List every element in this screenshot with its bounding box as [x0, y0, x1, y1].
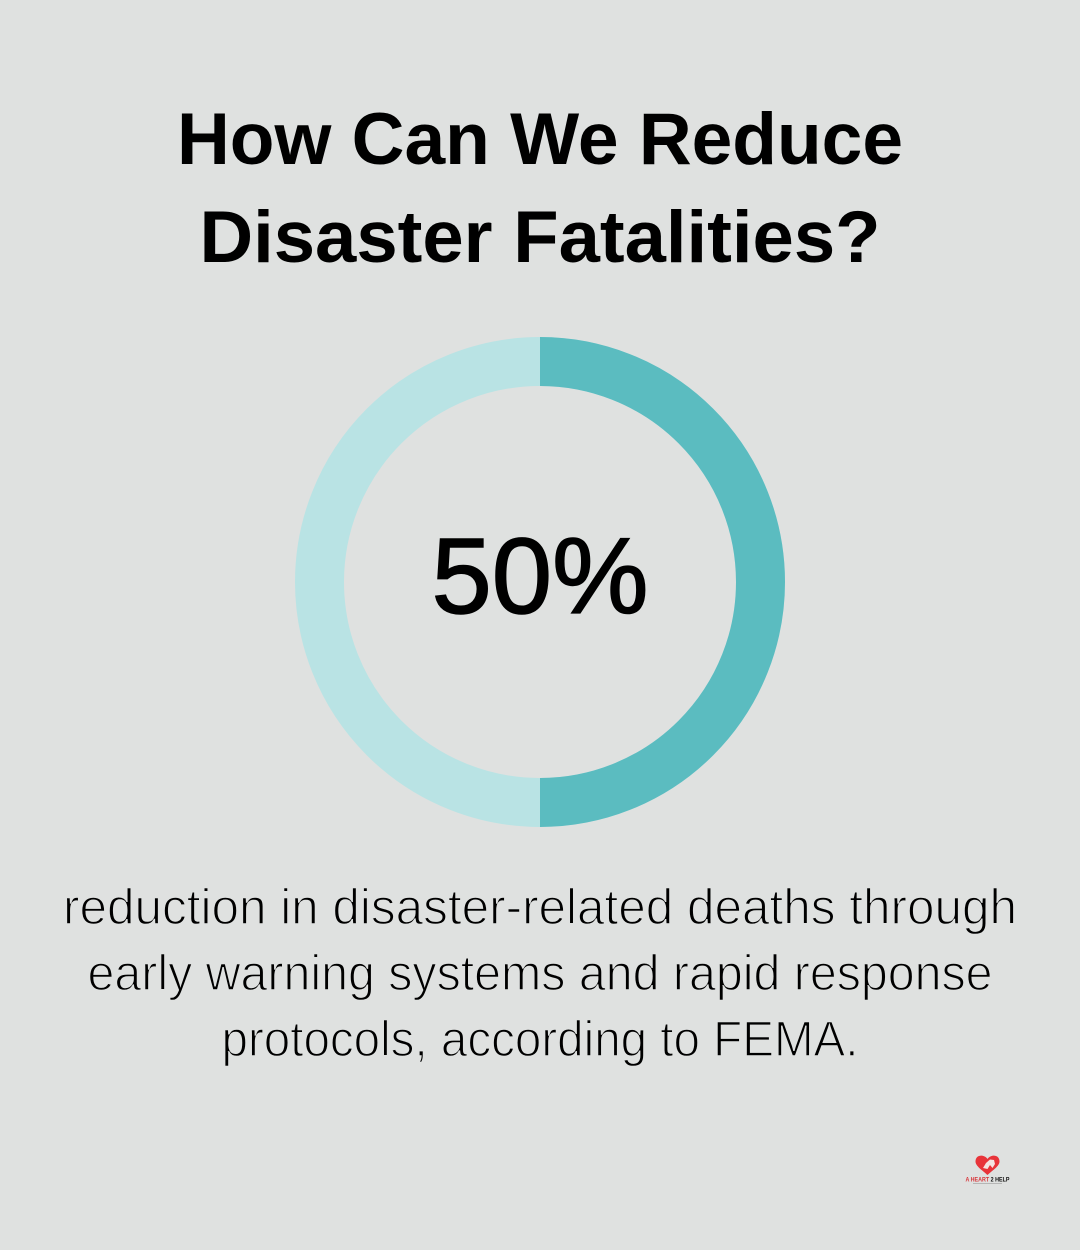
description text — [63, 879, 1017, 1067]
description text: early warning systems and rapid response — [88, 945, 992, 1001]
description text: reduction in disaster-related deaths through — [63, 879, 1017, 935]
title: Disaster Fatalities? — [200, 197, 881, 278]
icon: heart with hand — [976, 1156, 1000, 1175]
donut chart: 50% — [320, 362, 760, 802]
big number: 50% — [432, 515, 648, 636]
logo: A Heart 2 Help — [966, 1156, 1010, 1184]
description text: protocols, according to FEMA. — [222, 1011, 858, 1067]
logo wordmark: A HEART 2 HELP — [966, 1178, 1010, 1184]
title — [177, 99, 903, 278]
logo tagline — [973, 1183, 1002, 1184]
title: How Can We Reduce — [177, 99, 903, 180]
